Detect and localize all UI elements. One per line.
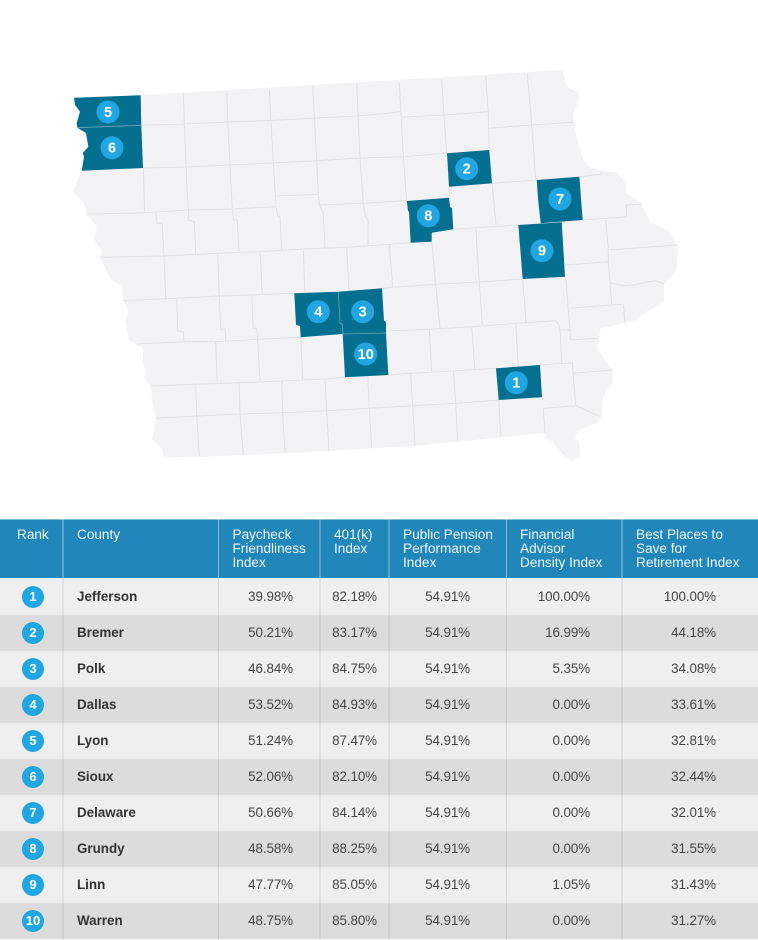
row 6: Sioux: 0.00%: [553, 769, 590, 784]
header: Rank: Rank: [17, 526, 49, 542]
row 10: Warren: 48.75%: [248, 913, 293, 928]
county: Lyon: [74, 95, 141, 128]
row 9: Linn: 9: [29, 877, 37, 892]
header: Financial Advisor Density Index: Density Index: [520, 554, 602, 570]
header: County: County: [77, 526, 120, 542]
county: Dallas: [294, 292, 343, 337]
header: 401(k) Index: 401(k): [334, 526, 373, 542]
row 1: Jefferson: 39.98%: [248, 589, 293, 604]
row 3: Polk: [0, 651, 758, 687]
row 6: Sioux: 32.44%: [671, 769, 716, 784]
row 10: Warren: Warren: [77, 913, 123, 928]
row 1: Jefferson: 82.18%: [332, 589, 377, 604]
row 5: Lyon: 54.91%: [425, 733, 470, 748]
header: Public Pension Performance Index: Performance: [403, 540, 481, 556]
row 4: Dallas: 53.52%: [248, 697, 293, 712]
header: Public Pension Performance Index: Public Pension: [403, 526, 493, 542]
row 7: Delaware: 54.91%: [425, 805, 470, 820]
row 10: Warren: 54.91%: [425, 913, 470, 928]
row 5: Lyon: 5: [29, 733, 37, 748]
county boundaries: [87, 73, 678, 457]
row 2: Bremer: 16.99%: [545, 625, 590, 640]
row 5: Lyon: Lyon: [77, 733, 108, 748]
marker 8: [417, 204, 440, 227]
row 3: Polk: 46.84%: [248, 661, 293, 676]
header: Financial Advisor Density Index: Advisor: [520, 540, 565, 556]
marker 4: 4: [314, 305, 322, 321]
row 6: Sioux: Sioux: [77, 769, 113, 784]
row 3: Polk: 84.75%: [332, 661, 377, 676]
row 5: Lyon: 87.47%: [332, 733, 377, 748]
marker 3: 3: [359, 305, 367, 321]
marker 9: [530, 239, 554, 262]
marker 2: 2: [463, 162, 471, 178]
marker 5: [96, 100, 120, 124]
row 9: Linn: 54.91%: [425, 877, 470, 892]
county: Linn: [518, 222, 565, 279]
row 2: Bremer: 2: [29, 625, 37, 640]
row 4: Dallas: 54.91%: [425, 697, 470, 712]
header: Best Places to Save for Retirement Index: Best Places to: [636, 526, 723, 542]
header: Best Places to Save for Retirement Index: Retirement Index: [636, 554, 740, 570]
row 7: Delaware: Delaware: [77, 805, 136, 820]
county: Grundy: [407, 198, 453, 243]
row 2: Bremer: 44.18%: [671, 625, 716, 640]
marker 10: [354, 342, 377, 366]
row 9: Linn: 47.77%: [248, 877, 293, 892]
header: Public Pension Performance Index: Index: [403, 554, 436, 570]
row 7: Delaware: 0.00%: [553, 805, 590, 820]
header: Paycheck Friendliness Index: Paycheck: [232, 526, 291, 542]
row 7: Delaware: 7: [29, 805, 37, 820]
row 8: Grundy: 0.00%: [553, 841, 590, 856]
row 1: Jefferson: 54.91%: [425, 589, 470, 604]
row 8: Grundy: 8: [29, 841, 37, 856]
row 2: Bremer: [0, 615, 758, 651]
marker 7: [548, 188, 572, 210]
row 3: Polk: 3: [29, 661, 37, 676]
header: Best Places to Save for Retirement Index: [636, 526, 740, 570]
row 8: Grundy: 48.58%: [248, 841, 293, 856]
header: 401(k) Index: Index: [334, 540, 367, 556]
row 4: Dallas: 84.93%: [332, 697, 377, 712]
row 5: Lyon: 0.00%: [553, 733, 590, 748]
marker 4: [307, 300, 330, 323]
row 8: Grundy: Grundy: [77, 841, 125, 856]
row 5: Lyon: [0, 723, 758, 759]
marker 6: [100, 136, 124, 159]
row 8: Grundy: 31.55%: [671, 841, 716, 856]
row 8: Grundy: [0, 831, 758, 867]
marker 5: 5: [104, 105, 112, 121]
row 1: Jefferson: Jefferson: [77, 589, 137, 604]
county: Sioux: [77, 125, 143, 171]
row 6: Sioux: 6: [29, 769, 37, 784]
row 3: Polk: Polk: [77, 661, 105, 676]
highlighted counties: [74, 95, 583, 400]
row 3: Polk: 5.35%: [553, 661, 590, 676]
row 8: Grundy: 88.25%: [332, 841, 377, 856]
row 7: Delaware: 32.01%: [671, 805, 716, 820]
row 3: Polk: 54.91%: [425, 661, 470, 676]
row 10: Warren: 0.00%: [553, 913, 590, 928]
row 1: Jefferson: 100.00%: [664, 589, 716, 604]
header: Public Pension Performance Index: [403, 526, 493, 570]
row 9: Linn: Linn: [77, 877, 105, 892]
marker 7: 7: [556, 192, 564, 208]
row 9: Linn: 31.43%: [671, 877, 716, 892]
row 6: Sioux: 52.06%: [248, 769, 293, 784]
marker 1: [505, 371, 528, 394]
county: Jefferson: [496, 365, 542, 400]
row 7: Delaware: 84.14%: [332, 805, 377, 820]
county: Delaware: [537, 177, 583, 223]
row 2: Bremer: 54.91%: [425, 625, 470, 640]
header: Best Places to Save for Retirement Index: Save for: [636, 540, 687, 556]
row 7: Delaware: 50.66%: [248, 805, 293, 820]
row 1: Jefferson: 1: [29, 589, 37, 604]
state outline: [73, 70, 678, 461]
map: Iowa counties: [73, 70, 678, 460]
row 10: Warren: 31.27%: [671, 913, 716, 928]
marker 8: 8: [424, 209, 432, 225]
header: Paycheck Friendliness Index: [232, 526, 306, 570]
row 4: Dallas: 4: [29, 697, 37, 712]
row 4: Dallas: [0, 687, 758, 723]
row 1: Jefferson: [0, 579, 758, 615]
row 10: Warren: 10: [26, 913, 40, 928]
row 9: Linn: 1.05%: [553, 877, 590, 892]
row 9: Linn: [0, 867, 758, 903]
marker 9: 9: [538, 244, 546, 260]
table: county rankings: [0, 519, 758, 940]
county: Polk: [338, 288, 386, 334]
row 5: Lyon: 51.24%: [248, 733, 293, 748]
row 6: Sioux: 82.10%: [332, 769, 377, 784]
row 6: Sioux: [0, 759, 758, 795]
row 1: Jefferson: 100.00%: [538, 589, 590, 604]
row 10: Warren: [0, 903, 758, 939]
row 7: Delaware: [0, 795, 758, 831]
row 4: Dallas: 0.00%: [553, 697, 590, 712]
row 2: Bremer: 50.21%: [248, 625, 293, 640]
row 6: Sioux: 54.91%: [425, 769, 470, 784]
county: Bremer: [447, 150, 492, 187]
marker 1: 1: [512, 376, 520, 392]
header: Paycheck Friendliness Index: Index: [232, 554, 266, 570]
header: 401(k) Index: [334, 526, 373, 556]
marker 2: [455, 157, 478, 180]
table header: [0, 519, 758, 578]
header: Paycheck Friendliness Index: Friendliness: [232, 540, 306, 556]
marker 6: 6: [108, 141, 116, 157]
header: Financial Advisor Density Index: Financial: [520, 526, 574, 542]
row 4: Dallas: 33.61%: [671, 697, 716, 712]
row 2: Bremer: 83.17%: [332, 625, 377, 640]
marker 3: [351, 300, 374, 323]
county: Warren: [343, 333, 388, 377]
row 9: Linn: 85.05%: [332, 877, 377, 892]
marker 10: 10: [358, 347, 374, 363]
row 5: Lyon: 32.81%: [671, 733, 716, 748]
header: Financial Advisor Density Index: [520, 526, 602, 570]
row 10: Warren: 85.80%: [332, 913, 377, 928]
row 4: Dallas: Dallas: [77, 697, 116, 712]
row 3: Polk: 34.08%: [671, 661, 716, 676]
row 2: Bremer: Bremer: [77, 625, 124, 640]
row 8: Grundy: 54.91%: [425, 841, 470, 856]
